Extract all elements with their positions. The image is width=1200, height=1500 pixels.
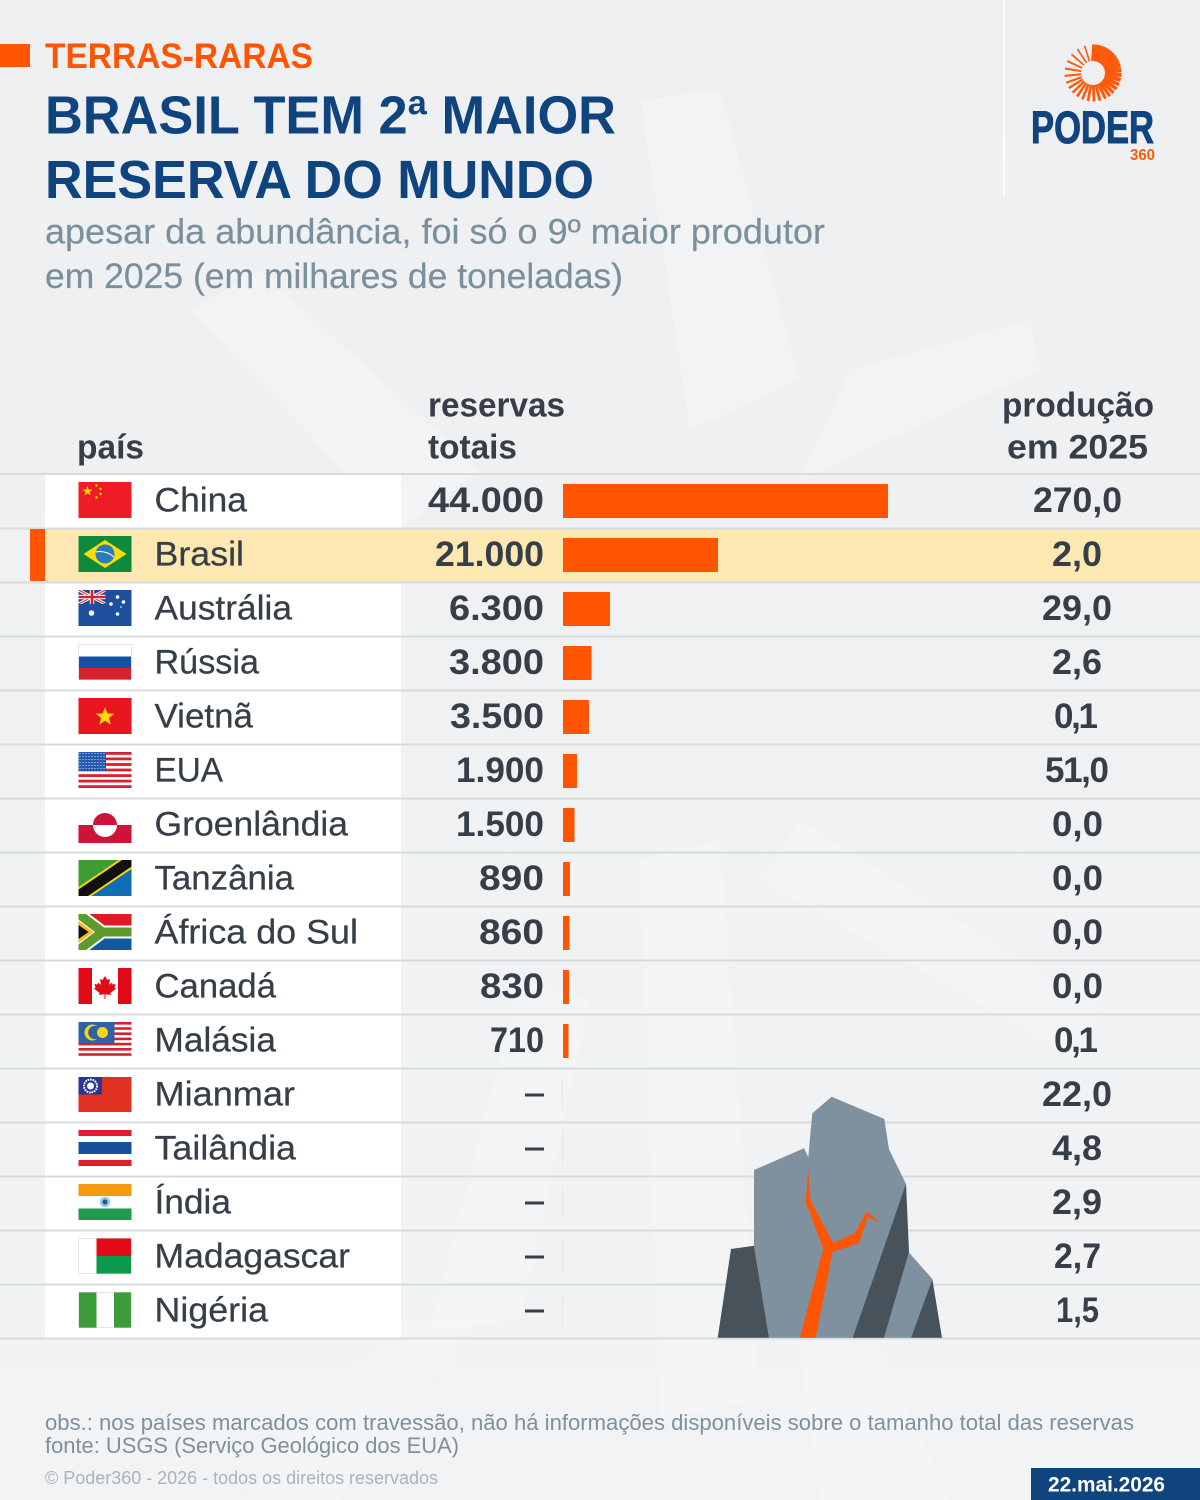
- flag: Groenlândia: [78, 807, 132, 843]
- logo 360: 360: [1130, 147, 1155, 164]
- table row backgrounds: [0, 473, 1200, 1340]
- row: Vietnã: [78, 697, 1098, 736]
- category marker: [0, 44, 30, 67]
- copyright: © Poder360 - 2026 - todos os direitos reservados: [45, 1468, 438, 1488]
- row: Canadá: 0,0: [1052, 967, 1103, 1006]
- row: Vietnã: 3.500: [450, 697, 544, 736]
- category label: TERRAS-RARAS: [45, 37, 313, 76]
- row: Austrália: 6.300: [449, 589, 544, 628]
- flag: Rússia: [78, 644, 132, 680]
- row: Groenlândia: 1.500: [456, 805, 544, 844]
- flag: Tanzânia: [78, 860, 132, 896]
- row: Canadá: [78, 967, 1103, 1006]
- subtitle: em 2025 (em milhares de toneladas): [45, 257, 623, 296]
- bar: Tanzânia: [563, 862, 570, 896]
- column header: produção em 2025: em 2025: [1007, 428, 1148, 466]
- row: Mianmar: Mianmar: [154, 1076, 295, 1114]
- row: África do Sul: 860: [479, 913, 544, 952]
- row: Índia: Índia: [154, 1184, 231, 1222]
- dash: Nigéria: [525, 1310, 544, 1312]
- flag: Nigéria: [78, 1292, 132, 1328]
- row: Austrália: Austrália: [154, 590, 292, 628]
- row: Nigéria: 1,5: [1056, 1291, 1099, 1330]
- flag: Tailândia: [78, 1130, 132, 1166]
- logo divider: [1003, 0, 1005, 196]
- row: Vietnã: Vietnã: [154, 698, 253, 736]
- bar: EUA: [563, 754, 577, 788]
- row: EUA: 1.900: [456, 751, 544, 790]
- row: Mianmar: 22,0: [1042, 1075, 1112, 1114]
- flag: Brasil: [78, 536, 132, 572]
- logo: Poder360: [1031, 45, 1155, 164]
- flag: Madagascar: [78, 1238, 132, 1274]
- row: EUA: [78, 751, 1109, 790]
- row: Malásia: Malásia: [154, 1022, 276, 1060]
- column header: país: país: [77, 428, 144, 466]
- illustration: rock with orange vein: [718, 1097, 942, 1338]
- flag: China: [78, 482, 132, 518]
- row: Brasil: 21.000: [435, 535, 544, 574]
- row: Nigéria: [78, 1291, 1099, 1330]
- row: EUA: 51,0: [1045, 751, 1109, 790]
- column header: reservas totais: totais: [428, 428, 517, 466]
- bar: Canadá: [563, 970, 569, 1004]
- bar: Brasil: [563, 538, 718, 572]
- bar: Groenlândia: [563, 808, 574, 842]
- dash: Tailândia: [525, 1148, 544, 1150]
- row: África do Sul: África do Sul: [154, 914, 358, 952]
- row: Índia: 2,9: [1052, 1183, 1102, 1222]
- bar: Rússia: [563, 646, 592, 680]
- row: Austrália: [78, 589, 1112, 628]
- logo wordmark: PODER: [1031, 102, 1154, 153]
- row: Groenlândia: Groenlândia: [154, 806, 348, 844]
- date badge: 22.mai.2026: [1048, 1472, 1165, 1496]
- subtitle: apesar da abundância, foi só o 9º maior produtor: [45, 212, 825, 252]
- bar: Austrália: [563, 592, 610, 626]
- title: BRASIL TEM 2ª MAIOR: [45, 86, 616, 146]
- flag: EUA: [78, 752, 132, 788]
- icon: logo sun: [1065, 45, 1121, 101]
- row: Canadá: Canadá: [154, 968, 276, 1006]
- title: [45, 86, 616, 210]
- row: Brasil: 2,0: [1052, 535, 1102, 574]
- row: China: [78, 481, 1122, 520]
- row: Rússia: 2,6: [1052, 643, 1102, 682]
- row: Malásia: [78, 1021, 1098, 1060]
- subtitle: [45, 212, 825, 296]
- row: EUA: EUA: [154, 752, 223, 790]
- column header: produção em 2025: produção: [1002, 386, 1154, 424]
- row: Tanzânia: Tanzânia: [154, 860, 294, 898]
- column header: reservas totais: [428, 386, 565, 466]
- row: Brasil: [78, 535, 1102, 574]
- flag: África do Sul: [78, 914, 132, 950]
- column header: produção em 2025: [1002, 386, 1154, 466]
- row: Malásia: 0,1: [1054, 1021, 1098, 1060]
- bar: África do Sul: [563, 916, 570, 950]
- bar: Malásia: [563, 1024, 568, 1058]
- row: China: 44.000: [428, 481, 544, 520]
- row: África do Sul: [78, 913, 1103, 952]
- row: Nigéria: Nigéria: [154, 1292, 268, 1330]
- bar: China: [563, 484, 888, 518]
- row: Madagascar: Madagascar: [154, 1238, 350, 1276]
- dash: Madagascar: [525, 1256, 544, 1258]
- row: Madagascar: 2,7: [1054, 1237, 1101, 1276]
- flag: Índia: [78, 1184, 132, 1220]
- row: Malásia: 710: [490, 1021, 544, 1060]
- row: China: 270,0: [1033, 481, 1122, 520]
- column header: reservas totais: reservas: [428, 386, 565, 424]
- highlight marker: Brasil: [30, 529, 45, 581]
- flag: Mianmar: [78, 1077, 132, 1112]
- row: Tanzânia: [78, 859, 1103, 898]
- flag: Vietnã: [78, 698, 132, 734]
- row: Canadá: 830: [480, 967, 544, 1006]
- footnote: observation and source: obs.: nos países marcados com travessão, não há informações disponíveis sobre o tamanho total das reservas: [45, 1410, 1134, 1435]
- dash: Índia: [525, 1202, 544, 1204]
- row: Vietnã: 0,1: [1054, 697, 1098, 736]
- row: Rússia: 3.800: [449, 643, 544, 682]
- row: Tailândia: 4,8: [1052, 1129, 1102, 1168]
- flag: Austrália: [78, 590, 132, 626]
- date badge: [1031, 1468, 1200, 1500]
- row: Groenlândia: 0,0: [1052, 805, 1103, 844]
- row: África do Sul: 0,0: [1052, 913, 1103, 952]
- row: China: China: [154, 482, 247, 520]
- row: Brasil: Brasil: [154, 536, 244, 574]
- row: Tanzânia: 0,0: [1052, 859, 1103, 898]
- bar: Vietnã: [563, 700, 589, 734]
- flag: Malásia: [78, 1022, 132, 1058]
- footnote: observation and source: [45, 1410, 1134, 1458]
- row: Groenlândia: [78, 805, 1103, 844]
- row: Tailândia: [78, 1129, 1102, 1168]
- row: Índia: [78, 1183, 1102, 1222]
- title: RESERVA DO MUNDO: [45, 150, 594, 210]
- row: Tailândia: Tailândia: [154, 1130, 296, 1168]
- row: Tanzânia: 890: [479, 859, 544, 898]
- row: Austrália: 29,0: [1042, 589, 1112, 628]
- flag: Canadá: [78, 968, 132, 1004]
- footnote: observation and source: fonte: USGS (Serviço Geológico dos EUA): [45, 1433, 459, 1458]
- row: Rússia: Rússia: [154, 644, 259, 682]
- dash: Mianmar: [525, 1094, 544, 1096]
- row: Rússia: [78, 643, 1102, 682]
- row: Mianmar: [78, 1075, 1112, 1114]
- row: Madagascar: [78, 1237, 1101, 1276]
